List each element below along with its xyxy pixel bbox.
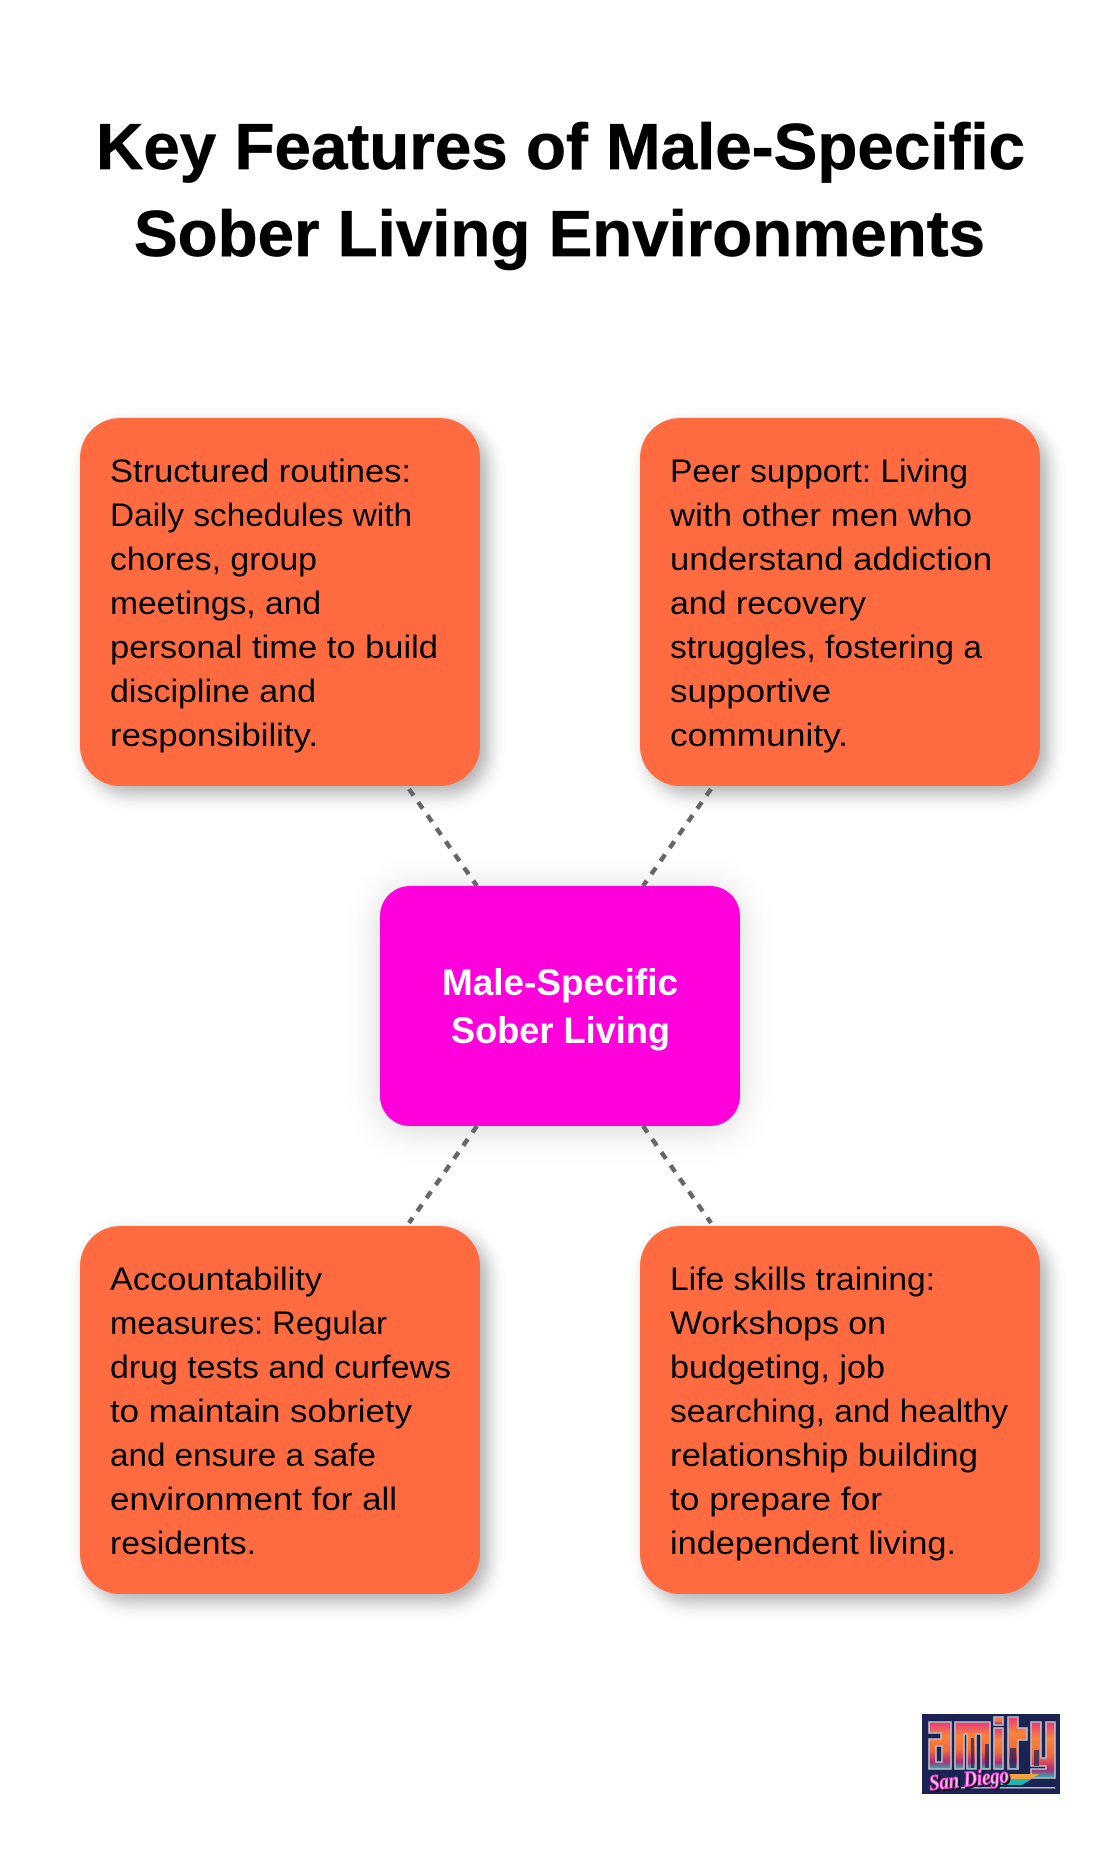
text: central hub label	[442, 962, 678, 1051]
text: structured routines: discipline and	[110, 673, 316, 709]
text: life skills training: independent living.	[670, 1525, 956, 1561]
arrow: top-right connector	[643, 789, 711, 886]
text: accountability measures: and ensure a safe	[110, 1437, 376, 1473]
skyline silhouettes	[971, 1738, 1039, 1768]
text: peer support: Peer support: Living	[670, 453, 968, 489]
text: life skills training: relationship building	[670, 1437, 978, 1473]
text: accountability measures	[110, 1261, 451, 1561]
text: peer support: and recovery	[670, 585, 866, 621]
text: structured routines	[110, 453, 438, 753]
text: accountability measures: Accountability	[110, 1261, 322, 1297]
text: life skills training	[670, 1261, 1008, 1561]
text: peer support: struggles, fostering a	[670, 629, 982, 665]
text: life skills training: budgeting, job	[670, 1349, 885, 1385]
text: structured routines: personal time to build	[110, 629, 438, 665]
text: structured routines: responsibility.	[110, 717, 318, 753]
text: peer support: with other men who	[669, 497, 972, 533]
text: life skills training: Life skills training:	[670, 1261, 935, 1297]
text: structured routines: chores, group	[110, 541, 317, 577]
title: Sober Living Environments	[134, 197, 985, 270]
connectors: dashed lines between hub and panels	[407, 788, 713, 1224]
beach stripes	[1000, 1774, 1040, 1779]
text: accountability measures: environment for all	[110, 1481, 397, 1517]
panel: life skills training	[640, 1226, 1040, 1594]
text: structured routines: meetings, and	[110, 585, 321, 621]
title	[96, 110, 1025, 270]
arrow: top-left connector	[409, 789, 477, 886]
panel: peer support	[640, 418, 1040, 786]
text: peer support	[669, 453, 992, 753]
text: accountability measures: residents.	[110, 1525, 256, 1561]
text: life skills training: to prepare for	[670, 1481, 882, 1517]
text: peer support: understand addiction	[670, 541, 992, 577]
logo: Amity San Diego	[922, 1714, 1060, 1794]
panel: structured routines	[80, 418, 480, 786]
arrow: bottom-right connector	[643, 1126, 711, 1223]
title: Key Features of Male-Specific	[96, 110, 1025, 183]
text: life skills training: Workshops on	[670, 1305, 886, 1341]
text: life skills training: searching, and healthy	[670, 1393, 1008, 1429]
text: structured routines: Structured routines:	[110, 453, 411, 489]
panel: accountability measures	[80, 1226, 480, 1594]
text: accountability measures: to maintain sobriety	[110, 1393, 412, 1429]
arrow: bottom-left connector	[409, 1126, 477, 1223]
text: peer support: community.	[670, 717, 848, 753]
panel: central hub	[380, 886, 740, 1126]
text: central hub label: Male-Specific	[442, 962, 678, 1003]
text: central hub label: Sober Living	[451, 1010, 670, 1051]
text: peer support: supportive	[670, 673, 831, 709]
text: structured routines: Daily schedules with	[110, 497, 412, 533]
text: accountability measures: measures: Regular	[110, 1305, 387, 1341]
text: accountability measures: drug tests and curfews	[110, 1349, 451, 1385]
